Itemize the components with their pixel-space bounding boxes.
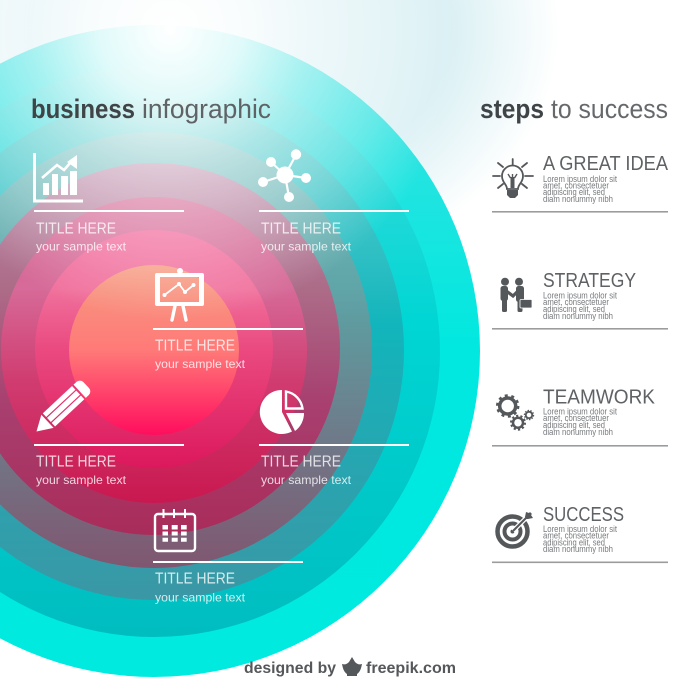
step: a great idea	[492, 153, 669, 213]
step text: adipiscing elit, sed	[543, 538, 605, 548]
step heading: A GREAT IDEA	[543, 153, 669, 175]
credit: designed by freepik: designed by	[244, 660, 336, 677]
divider	[492, 562, 668, 563]
icon: network nodes	[258, 149, 311, 202]
step: success	[492, 504, 668, 563]
divider	[492, 211, 668, 213]
item text: your sample text	[155, 357, 246, 371]
step text: adipiscing elit, sed	[543, 420, 605, 430]
step text: amet, consectetuer	[543, 180, 609, 190]
item text: your sample text	[36, 240, 127, 254]
item title: TITLE HERE	[36, 454, 116, 470]
divider	[34, 444, 184, 446]
step heading: TEAMWORK	[543, 386, 656, 408]
step text: adipiscing elit, sed	[543, 187, 605, 197]
step text: Lorem ipsum dolor sit	[543, 290, 617, 300]
icon: light bulb	[493, 159, 533, 198]
item text: your sample text	[155, 590, 246, 604]
icon: freepik logo	[342, 657, 362, 676]
divider	[34, 210, 184, 212]
icon: gears	[497, 396, 534, 430]
icon: handshake	[500, 278, 532, 312]
item: pencil	[30, 379, 184, 487]
item title: TITLE HERE	[155, 570, 235, 588]
credit: designed by freepik: freepik.com	[366, 660, 456, 677]
title: business	[31, 94, 135, 124]
heading: steps to success: to success	[551, 94, 668, 124]
step text: amet, consectetuer	[543, 413, 609, 423]
step text: Lorem ipsum dolor sit	[543, 406, 617, 416]
icon: presentation board	[155, 268, 204, 320]
step: strategy	[492, 270, 668, 330]
step text	[543, 406, 617, 437]
item title: TITLE HERE	[155, 338, 235, 354]
step text: adipiscing elit, sed	[543, 304, 605, 314]
step text: amet, consectetuer	[543, 530, 609, 540]
step text: Lorem ipsum dolor sit	[543, 524, 617, 534]
step heading: STRATEGY	[543, 270, 636, 292]
step: teamwork	[492, 386, 668, 447]
item: growth chart	[34, 153, 184, 254]
divider	[492, 328, 668, 330]
step heading: SUCCESS	[543, 504, 624, 526]
credit: designed by freepik	[244, 657, 456, 677]
step text: diam nonummy nibh	[543, 544, 613, 554]
item: network	[258, 149, 409, 254]
step text: diam nonummy nibh	[543, 427, 613, 437]
item title: TITLE HERE	[261, 220, 341, 238]
item text: your sample text	[36, 473, 127, 487]
icon: pie chart	[260, 390, 304, 434]
step text	[543, 290, 617, 321]
step text: diam nonummy nibh	[543, 194, 613, 204]
divider	[153, 328, 303, 330]
icon: calendar	[155, 509, 195, 551]
icon: target	[498, 512, 533, 546]
step text: diam nonummy nibh	[543, 311, 613, 321]
concentric circles	[0, 25, 480, 677]
step text: amet, consectetuer	[543, 297, 609, 307]
item: calendar	[153, 509, 303, 604]
step text	[543, 174, 617, 204]
item title: TITLE HERE	[36, 220, 116, 238]
item: pie chart	[259, 390, 409, 487]
divider	[259, 444, 409, 446]
item title: TITLE HERE	[261, 454, 341, 470]
icon: bar chart	[34, 153, 83, 201]
divider	[259, 210, 409, 212]
heading: steps to success: steps	[480, 94, 544, 124]
step text: Lorem ipsum dolor sit	[543, 174, 617, 184]
step text	[543, 524, 617, 554]
title: infographic	[142, 94, 271, 124]
item: presentation	[153, 268, 303, 371]
divider	[492, 445, 668, 447]
icon: pencil	[30, 379, 92, 438]
item text: your sample text	[261, 240, 352, 254]
divider	[153, 561, 303, 563]
item text: your sample text	[261, 473, 352, 487]
